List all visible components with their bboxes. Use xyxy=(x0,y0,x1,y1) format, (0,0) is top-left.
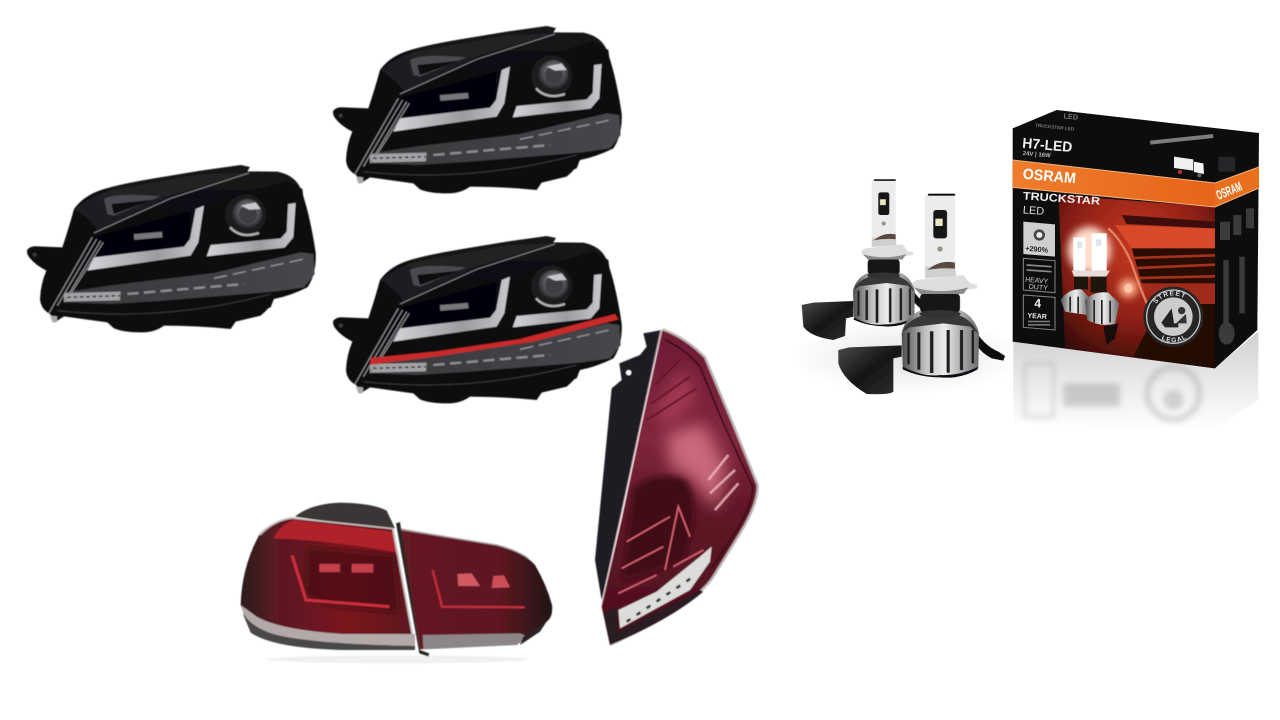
street legal seal xyxy=(1143,286,1204,347)
street legal seal: LEGAL xyxy=(1162,335,1186,342)
top face printing: LED xyxy=(1063,111,1079,122)
badge: heavy duty: HEAVY xyxy=(1025,277,1049,286)
reflection details xyxy=(1025,363,1199,419)
side OSRAM logo: OSRAM xyxy=(1214,179,1244,203)
street legal seal: STREET xyxy=(1153,290,1186,304)
front driver box xyxy=(838,345,902,394)
badge: +290%: +290% xyxy=(1025,244,1049,255)
upper dark cap xyxy=(295,503,395,528)
product subtitle: LED xyxy=(1022,204,1045,218)
side face icons xyxy=(1218,157,1254,345)
lens body xyxy=(602,329,758,645)
reverse lamp insert xyxy=(618,547,712,628)
floor shadow xyxy=(267,655,527,663)
floor reflection xyxy=(793,320,1020,393)
LED bulb set xyxy=(793,179,1020,394)
truck icon xyxy=(1174,157,1204,177)
top face printing: TRUCKSTAR LED xyxy=(1035,123,1075,132)
rear bulb xyxy=(853,179,936,326)
front bulb xyxy=(902,194,1005,378)
badge: 4 year xyxy=(1023,295,1055,330)
rear driver box xyxy=(802,301,853,340)
box silhouette: top and side faces xyxy=(1013,110,1259,368)
mounting bracket xyxy=(595,330,662,600)
badge: heavy duty xyxy=(1023,258,1055,293)
band edge highlights xyxy=(1013,160,1259,207)
headlight: black with red stripe xyxy=(333,236,622,403)
headlight: black, left xyxy=(27,165,316,332)
heading H7-LED: H7-LED xyxy=(1022,136,1073,156)
headlight: black, top xyxy=(333,26,622,193)
product name: TRUCKSTAR xyxy=(1022,190,1101,208)
rating: 24V | 16W xyxy=(1022,151,1051,159)
glow behind box bulbs xyxy=(1068,227,1111,273)
badge: heavy duty: DUTY xyxy=(1028,284,1048,292)
box reflection xyxy=(1013,332,1258,430)
OSRAM logo: OSRAM xyxy=(1022,166,1077,187)
badge: 4 year: YEAR xyxy=(1027,313,1047,321)
vertical tail light xyxy=(595,329,758,645)
badge: +290% xyxy=(1023,222,1055,257)
truck photo xyxy=(1058,195,1215,368)
centre seam xyxy=(396,522,429,657)
top face printing xyxy=(1035,111,1213,145)
product box: TRUCKSTAR LED xyxy=(1012,110,1260,425)
tail light pair xyxy=(241,503,552,663)
badge: 4 year: 4 xyxy=(1034,297,1041,311)
orange OSRAM band xyxy=(1013,160,1215,207)
red accent stripe xyxy=(370,314,619,365)
pink glass highlights xyxy=(623,367,727,580)
inner tail light xyxy=(400,528,552,649)
side orange band xyxy=(1215,167,1259,207)
outer tail light xyxy=(241,517,415,650)
bulbs on box xyxy=(1061,233,1119,345)
